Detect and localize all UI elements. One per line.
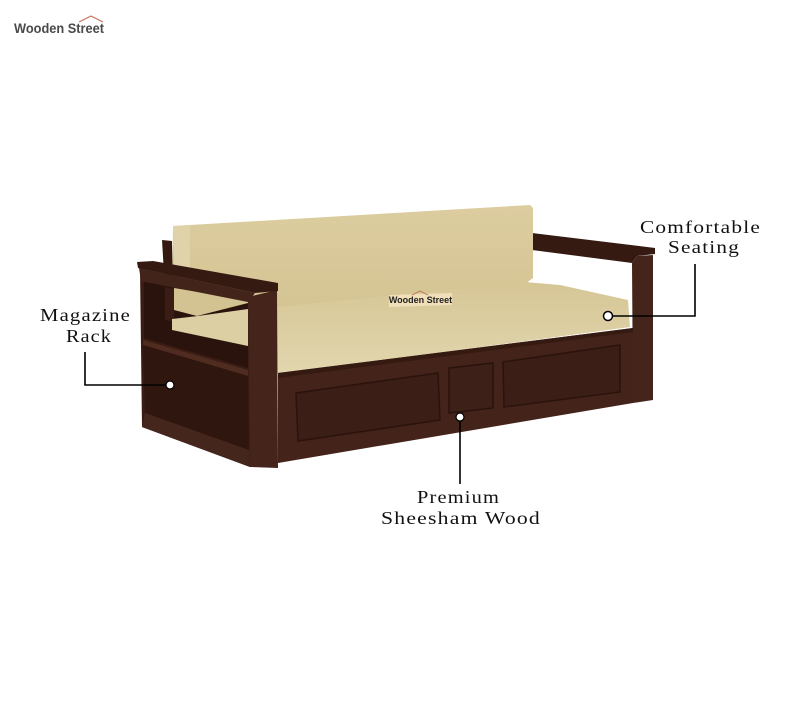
drawer panels <box>296 373 440 441</box>
storage base <box>278 328 633 463</box>
callout: premium sheesham wood <box>381 413 541 528</box>
callout: magazine rack: Rack <box>66 326 112 346</box>
callout: premium sheesham wood: Premium <box>417 487 500 507</box>
callout: comfortable seating: Seating <box>668 237 740 257</box>
callout: premium sheesham wood: Sheesham Wood <box>381 508 541 528</box>
seat cushion <box>248 282 630 373</box>
right arm rest <box>532 233 655 403</box>
sofa <box>137 205 655 468</box>
seat through opening <box>172 309 248 346</box>
back post through opening <box>165 287 174 322</box>
callout: comfortable seating: Comfortable <box>640 217 761 237</box>
left side panel and shelf <box>140 268 250 467</box>
logo: Wooden Street <box>14 20 104 36</box>
callout: magazine rack: Magazine <box>40 305 131 325</box>
tag: Wooden Street <box>389 295 452 305</box>
left front post <box>248 290 278 468</box>
callout: comfortable seating <box>604 217 761 320</box>
left arm rest <box>137 261 278 302</box>
tag <box>389 291 452 307</box>
back post <box>162 240 173 290</box>
callout: magazine rack <box>40 305 174 389</box>
backrest through opening <box>174 288 248 316</box>
backrest cushion <box>172 205 533 316</box>
